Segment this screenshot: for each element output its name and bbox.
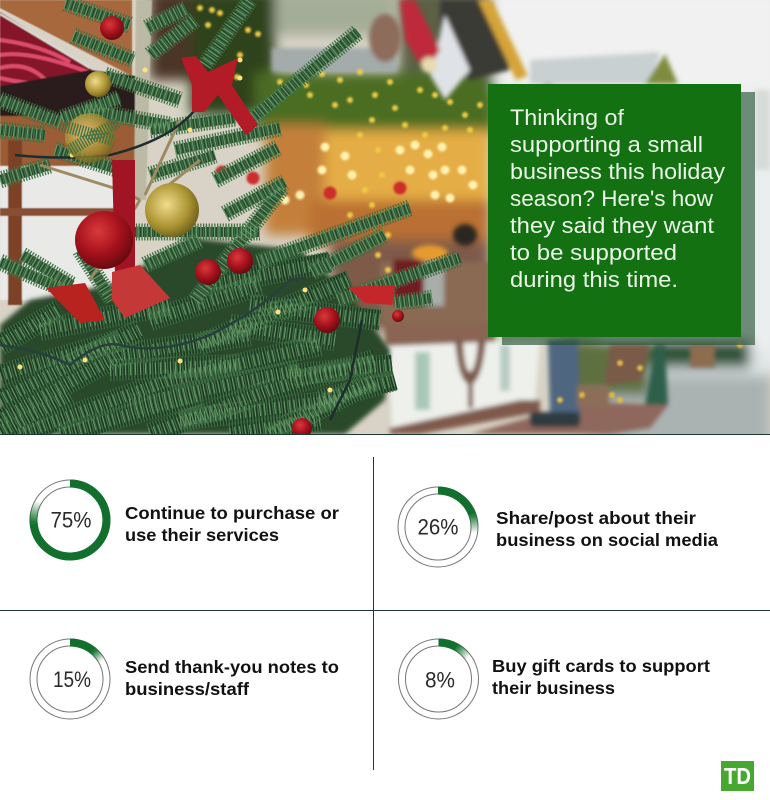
callout: intro text panel: season? Here's how [510, 186, 713, 211]
photo bottom rule [0, 434, 770, 435]
stat: 8 percent: 8% [425, 668, 455, 692]
photo: red and gold ornaments and bows [46, 16, 404, 438]
photo: wooden roof and red awning [0, 0, 152, 305]
stat: 15 percent: 15% [53, 667, 91, 692]
stat: 15 percent: Send thank-you notes to [125, 657, 339, 677]
stat: 26 percent [398, 487, 718, 567]
stat: 26 percent: business on social media [496, 530, 718, 550]
photo: right stall details [272, 0, 770, 434]
stat: 26 percent: Share/post about their [496, 508, 696, 528]
stat: 8 percent [398, 639, 710, 719]
callout: intro text panel: business this holiday [510, 159, 725, 184]
stat: 75 percent: 75% [50, 508, 92, 532]
stat: 75 percent: use their services [125, 525, 279, 545]
callout: intro text panel: they said they want [510, 213, 714, 238]
photo: Christmas tree at a holiday market [0, 0, 770, 445]
callout: intro text panel: during this time. [510, 267, 678, 292]
stat: 15 percent: business/staff [125, 679, 249, 699]
stat: 75 percent: Continue to purchase or [125, 503, 339, 523]
stat: 8 percent: their business [492, 678, 615, 698]
callout: intro text panel: supporting a small [510, 132, 703, 157]
stat: 75 percent [30, 480, 339, 560]
stat: 15 percent [30, 639, 339, 719]
logo: TD: TD [724, 763, 751, 789]
photo: tree foliage [0, 0, 460, 434]
callout: intro text panel [488, 84, 741, 337]
callout: intro text panel: Thinking of [510, 105, 625, 130]
stat: 26 percent: 26% [418, 514, 458, 540]
stat: 8 percent: Buy gift cards to support [492, 656, 710, 676]
photo: bokeh string lights [200, 8, 740, 400]
callout panel shadow [502, 92, 755, 345]
callout: intro text panel: to be supported [510, 240, 677, 265]
photo background: market stalls [150, 0, 770, 445]
